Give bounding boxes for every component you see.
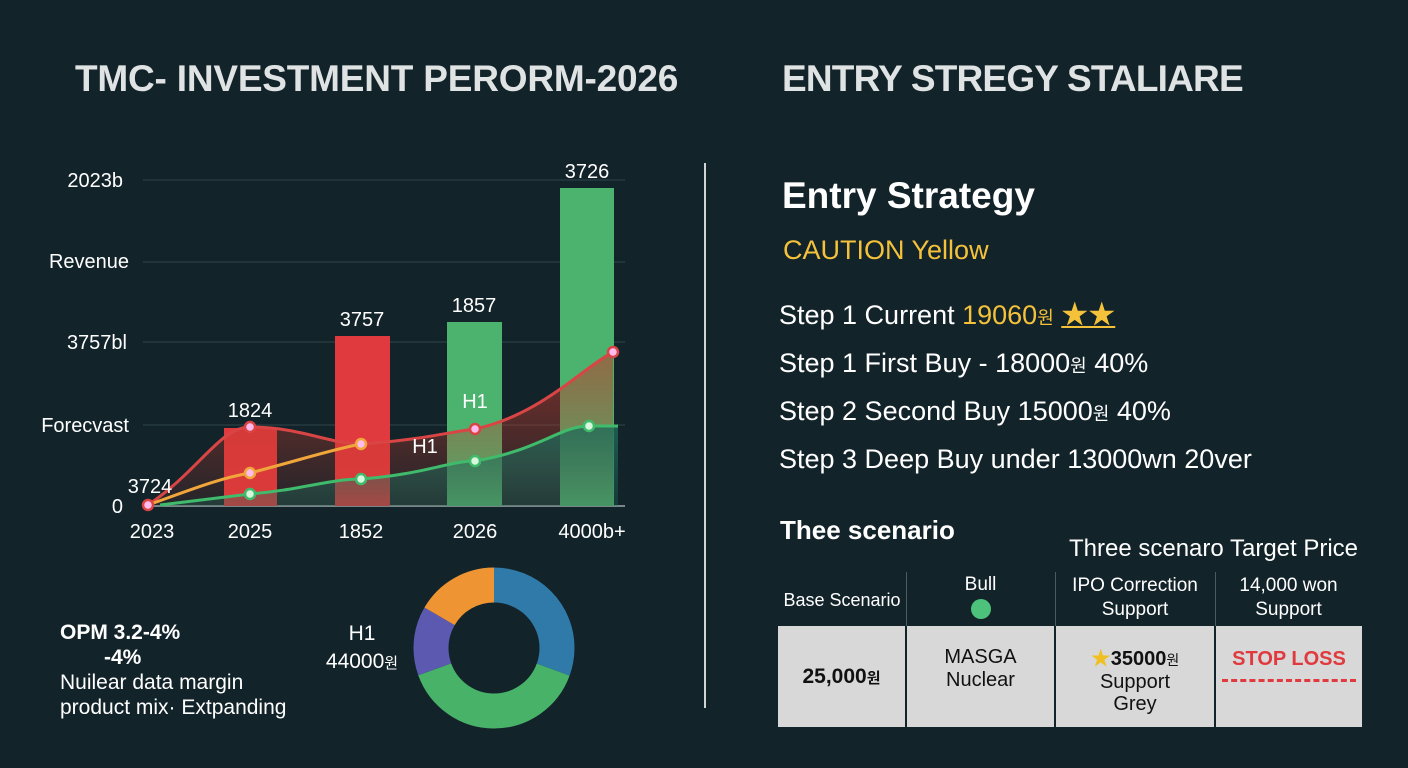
labels: H1 xyxy=(462,391,488,413)
donut label: 44000원 xyxy=(326,650,398,673)
text block: OPM: OPM 3.2-4% xyxy=(60,621,180,644)
table: Grey xyxy=(1113,693,1157,715)
donut label xyxy=(326,622,398,673)
labels xyxy=(41,161,626,543)
steps: Step 1 Current 19060원 ★★ xyxy=(779,300,1115,330)
labels: 3726 xyxy=(565,161,609,183)
labels: 1857 xyxy=(452,295,496,317)
area fills xyxy=(148,352,613,506)
labels: 0 xyxy=(112,496,123,518)
labels: 1852 xyxy=(339,521,383,543)
table: Bull xyxy=(965,574,996,595)
table xyxy=(778,572,1362,727)
donut chart xyxy=(414,568,574,728)
table: 25,000원 xyxy=(802,665,881,688)
title: left: TMC- INVESTMENT PERORM-2026 xyxy=(75,58,678,99)
divider xyxy=(704,163,706,708)
steps: Step 2 Second Buy 15000원 40% xyxy=(779,396,1171,426)
text block: OPM xyxy=(60,621,286,719)
text block: OPM: product mix· Extpanding xyxy=(60,696,286,719)
scenario heading: Thee scenario xyxy=(780,515,955,545)
table: IPO Correction xyxy=(1072,575,1198,596)
table: 14,000 won xyxy=(1239,575,1338,596)
labels: 3757bl xyxy=(67,332,127,354)
table: Base Scenario xyxy=(783,590,901,610)
labels: 1824 xyxy=(228,400,272,422)
labels: 2026 xyxy=(453,521,497,543)
table: Nuclear xyxy=(946,669,1015,691)
chart: revenue bar and line xyxy=(41,161,626,543)
table: Support xyxy=(1102,599,1168,620)
table: ★35000원 xyxy=(1091,648,1179,670)
table: Support xyxy=(1100,671,1170,693)
table: MASGA xyxy=(944,646,1017,668)
caution: CAUTION Yellow xyxy=(783,235,989,265)
steps: Step 3 Deep Buy under 13000wn 20ver xyxy=(779,444,1252,474)
labels: 2025 xyxy=(228,521,272,543)
heading: Entry Strategy: Entry Strategy xyxy=(782,175,1035,216)
labels: H1 xyxy=(412,436,438,458)
donut label: H1 xyxy=(349,622,375,645)
table: Support xyxy=(1255,599,1322,620)
labels: Forecvast xyxy=(41,415,129,437)
labels: 3724 xyxy=(128,476,172,498)
steps: Step 1 First Buy - 18000원 40% xyxy=(779,348,1148,378)
labels: 2023 xyxy=(130,521,174,543)
table: STOP LOSS xyxy=(1232,648,1346,670)
text: Three scenaro Target Price xyxy=(1069,535,1358,562)
bars xyxy=(224,188,614,506)
lines xyxy=(148,352,613,505)
labels: Revenue xyxy=(49,251,129,273)
title: right: ENTRY STREGY STALIARE xyxy=(782,58,1243,99)
labels: 4000b+ xyxy=(558,521,626,543)
labels: 3757 xyxy=(340,309,384,331)
labels: 2023b xyxy=(67,170,123,192)
text block: OPM: -4% xyxy=(104,646,141,669)
steps xyxy=(779,300,1252,474)
text block: OPM: Nuilear data margin xyxy=(60,671,243,694)
